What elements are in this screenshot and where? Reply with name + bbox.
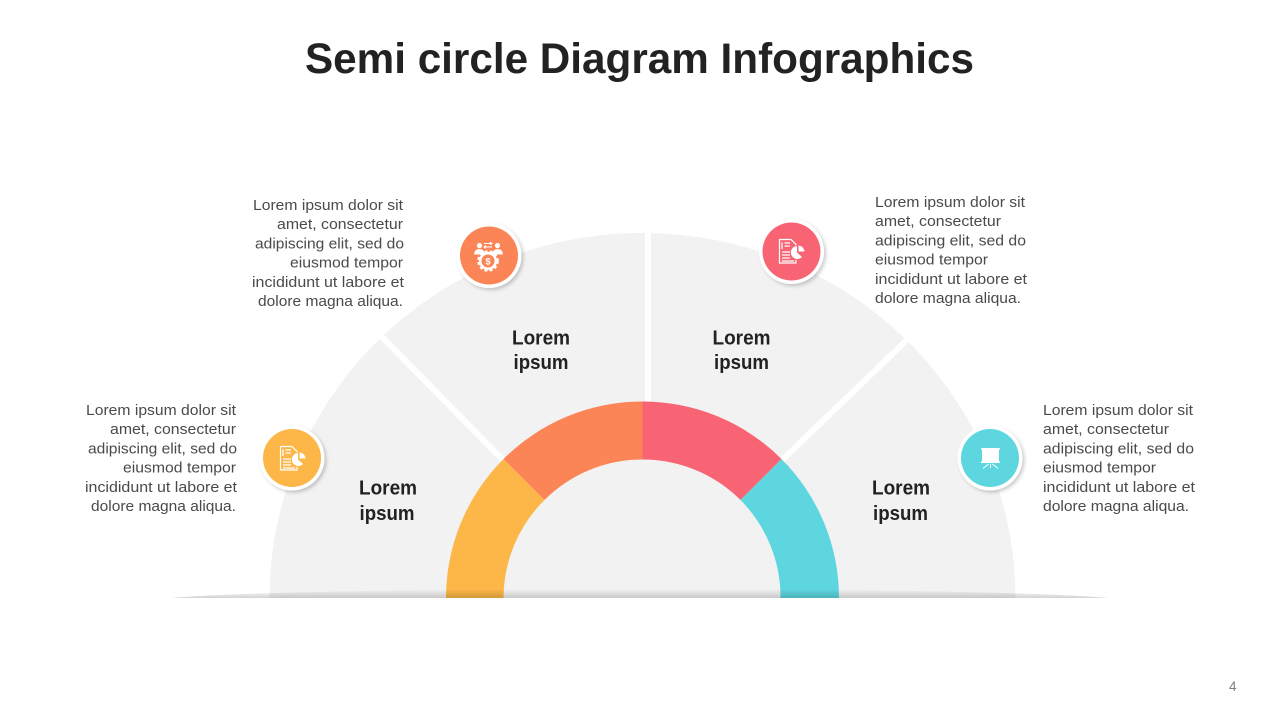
text block: upper right: adipiscing elit, sed do: [875, 232, 1026, 249]
text block: lower right: Lorem ipsum dolor sit: [1043, 402, 1194, 419]
segment: teal ring: [740, 459, 839, 598]
text block: upper left: eiusmod tempor: [290, 255, 403, 272]
text block: upper right: Lorem ipsum dolor sit: [875, 194, 1026, 211]
text block: upper left: Lorem ipsum dolor sit: [253, 197, 404, 214]
text block: upper left: amet, consectetur: [277, 216, 403, 233]
heading: upper left: ipsum: [514, 352, 568, 374]
text block: upper right: dolore magna aliqua.: [875, 290, 1021, 307]
segment: yellow ring: [446, 459, 544, 598]
text block: upper right: [875, 194, 1028, 307]
text block: upper left: [252, 197, 405, 310]
text block: lower right: adipiscing elit, sed do: [1043, 440, 1194, 457]
heading: upper left: Lorem: [512, 328, 570, 350]
text block: lower left: incididunt ut labore et: [85, 479, 238, 496]
text block: lower right: incididunt ut labore et: [1043, 479, 1196, 496]
text block: lower left: [85, 402, 238, 515]
title: Semi circle Diagram Infographics: [305, 35, 974, 83]
panel: grey semi circle sectors: [270, 228, 1016, 598]
heading: upper right: Lorem: [712, 328, 770, 350]
icon: orange people and gear: [456, 223, 522, 288]
text block: lower right: eiusmod tempor: [1043, 460, 1156, 477]
text block: lower left: adipiscing elit, sed do: [88, 440, 237, 457]
heading: lower right: ipsum: [873, 503, 928, 525]
text block: lower right: [1043, 402, 1196, 515]
segment: orange ring: [504, 401, 642, 500]
text block: lower left: Lorem ipsum dolor sit: [86, 402, 237, 419]
heading: lower left: ipsum: [360, 503, 414, 525]
icon: yellow document with pie chart: [260, 426, 324, 490]
heading: upper right: ipsum: [714, 352, 769, 374]
text block: lower right: amet, consectetur: [1043, 421, 1169, 438]
heading: lower left: [359, 478, 417, 525]
text block: upper right: amet, consectetur: [875, 213, 1001, 230]
text block: upper left: adipiscing elit, sed do: [255, 235, 404, 252]
heading: lower left: Lorem: [359, 478, 417, 500]
base shadow: [172, 589, 1108, 598]
semi circle diagram: [172, 228, 1108, 598]
heading: lower right: [872, 478, 930, 525]
heading: lower right: Lorem: [872, 478, 930, 500]
segment: red ring: [642, 401, 782, 500]
text block: lower left: eiusmod tempor: [123, 460, 236, 477]
icon: teal presentation board: [958, 426, 1022, 490]
page number: 4: [1229, 679, 1237, 694]
text block: upper right: incididunt ut labore et: [875, 271, 1028, 288]
text block: upper left: incididunt ut labore et: [252, 274, 405, 291]
heading: upper left: [512, 328, 570, 374]
icon: red document with pie chart: [759, 219, 824, 284]
text block: lower left: dolore magna aliqua.: [91, 498, 236, 515]
text block: upper left: dolore magna aliqua.: [258, 293, 403, 310]
text block: upper right: eiusmod tempor: [875, 252, 988, 269]
icon: orange people and gear: $: [485, 256, 491, 268]
text block: lower left: amet, consectetur: [110, 421, 236, 438]
text block: lower right: dolore magna aliqua.: [1043, 498, 1189, 515]
heading: upper right: [712, 328, 770, 374]
